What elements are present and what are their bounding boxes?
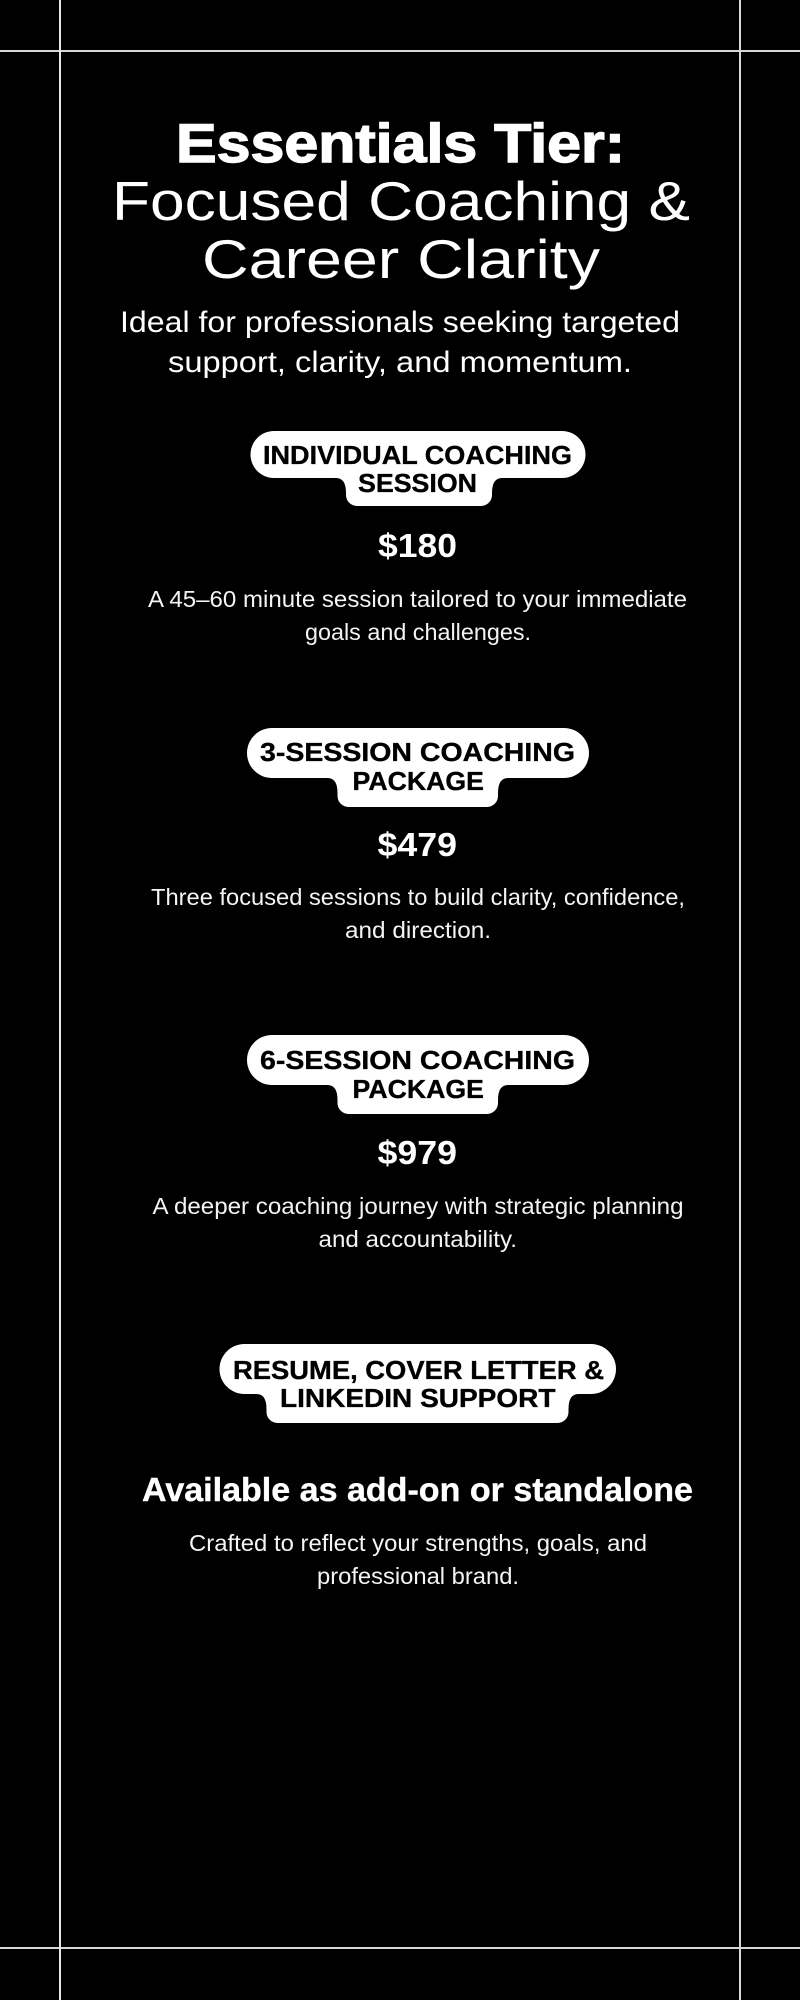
description: resume support [189, 1530, 647, 1589]
panel: resume, cover letter and linkedin support [142, 1344, 693, 1589]
title: Career Clarity [202, 228, 601, 290]
pill: 3-session package [247, 728, 589, 807]
description: 6-session package [152, 1193, 684, 1252]
description: 6-session package: A deeper coaching journey with strategic planning [152, 1193, 684, 1219]
availability heading: Available as add-on or standalone [142, 1471, 693, 1508]
pill: 3-session package: PACKAGE [352, 766, 484, 796]
pill: resume support [220, 1344, 616, 1423]
description: individual session: A 45–60 minute session tailored to your immediate [148, 586, 687, 612]
description: 3-session package: Three focused sessions to build clarity, confidence, [151, 884, 685, 910]
pill: individual coaching session [250, 431, 585, 506]
description: individual session [148, 586, 687, 645]
price: $979: $979 [378, 1134, 457, 1171]
pill: 6-session package [247, 1035, 589, 1114]
pill: 3-session package: 3-SESSION COACHING [260, 737, 575, 767]
price: $180: $180 [378, 527, 457, 564]
pill: resume support: RESUME, COVER LETTER & [233, 1355, 604, 1385]
panel: 3-session coaching package [151, 728, 685, 943]
title [112, 112, 690, 290]
pill: 6-session package: PACKAGE [352, 1074, 484, 1104]
title: Essentials Tier: [176, 112, 625, 174]
description: 6-session package: and accountability. [318, 1226, 517, 1252]
description: 3-session package: and direction. [345, 917, 491, 943]
pill: individual coaching session: INDIVIDUAL COACHING [263, 440, 572, 470]
subtitle: support, clarity, and momentum. [168, 346, 632, 379]
description: 3-session package [151, 884, 685, 943]
pill: 6-session package: 6-SESSION COACHING [260, 1045, 575, 1075]
description: resume support: Crafted to reflect your strengths, goals, and [189, 1530, 647, 1556]
subtitle [120, 306, 680, 379]
panel: individual coaching session [148, 431, 687, 645]
pill: resume support: LINKEDIN SUPPORT [280, 1383, 556, 1413]
title: Focused Coaching & [112, 170, 690, 232]
price: $479: $479 [378, 826, 457, 863]
pill: individual coaching session: SESSION [358, 468, 477, 498]
subtitle: Ideal for professionals seeking targeted [120, 306, 680, 339]
description: resume support: professional brand. [317, 1563, 519, 1589]
panel: 6-session coaching package [152, 1035, 684, 1252]
description: individual session: goals and challenges. [305, 619, 531, 645]
